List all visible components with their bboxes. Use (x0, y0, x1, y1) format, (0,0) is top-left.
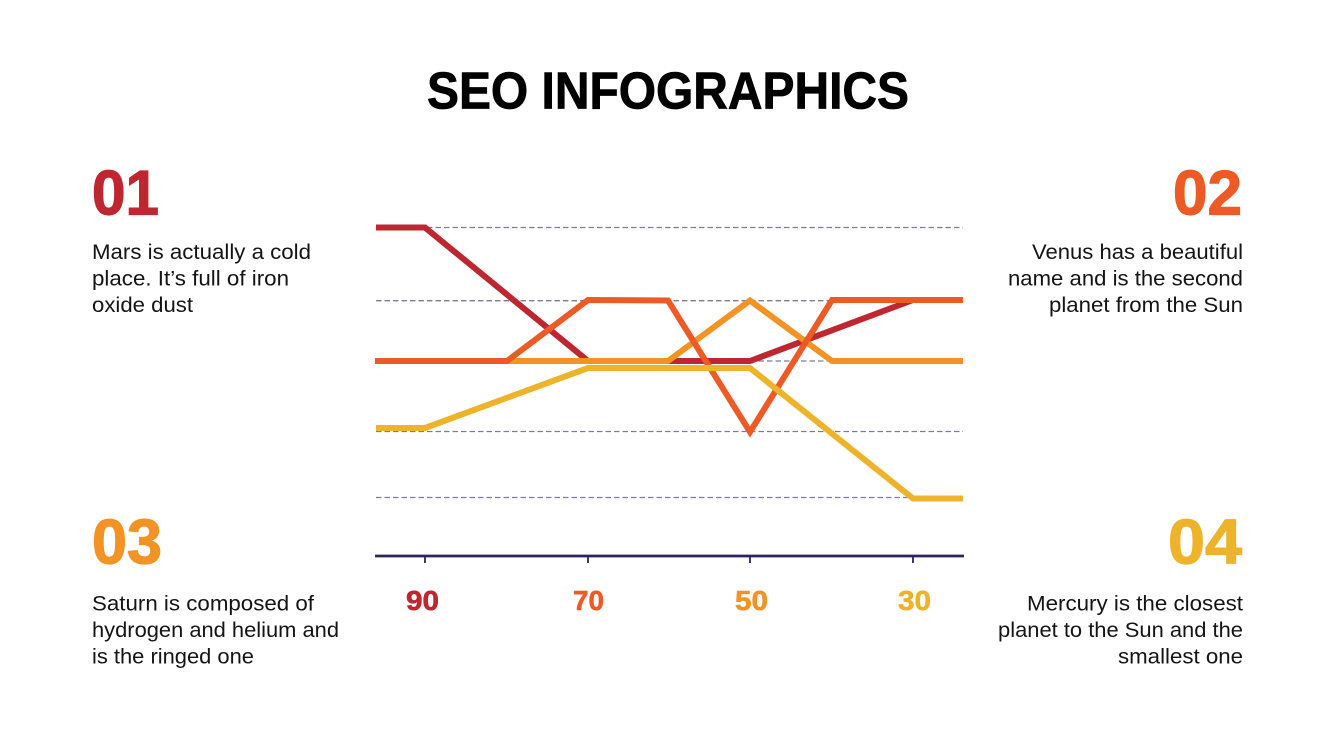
series: orange line (375, 300, 963, 361)
text block: Mars: Mars is actually a cold (92, 240, 311, 264)
number 03: 03 (92, 508, 162, 578)
text block: Saturn (92, 592, 339, 668)
series: yellow line (376, 368, 963, 498)
panel: 03 Saturn (92, 508, 339, 668)
text block: Saturn: is the ringed one (92, 644, 254, 668)
panel: 04 Mercury (998, 508, 1243, 668)
text block: Venus: planet from the Sun (1049, 293, 1243, 317)
text block: Mars: place. It’s full of iron (92, 266, 289, 290)
axis label 30: 30 (898, 585, 931, 616)
series: red line (376, 228, 963, 361)
number 04: 04 (1168, 508, 1242, 578)
text block: Venus: name and is the second (1008, 266, 1243, 290)
text block: Venus (1008, 240, 1243, 317)
panel: 01 Mars (92, 158, 311, 317)
series: dark orange line (375, 300, 963, 432)
text block: Saturn: hydrogen and helium and (92, 618, 339, 642)
text block: Mercury: planet to the Sun and the (998, 618, 1243, 642)
x axis (375, 556, 964, 563)
text block: Mercury: Mercury is the closest (1027, 592, 1243, 616)
text block: Saturn: Saturn is composed of (92, 592, 314, 616)
panel: 02 Venus (1008, 158, 1243, 317)
line chart (375, 228, 964, 616)
axis label 70: 70 (573, 585, 604, 616)
text block: Mercury (998, 592, 1243, 668)
axis label 50: 50 (735, 585, 768, 616)
title: SEO INFOGRAPHICS (427, 62, 909, 120)
text block: Mercury: smallest one (1118, 644, 1243, 668)
text block: Venus: Venus has a beautiful (1032, 240, 1243, 264)
text block: Mars: oxide dust (92, 293, 193, 317)
number 02: 02 (1173, 158, 1242, 228)
text block: Mars (92, 240, 311, 317)
number 01: 01 (92, 158, 159, 228)
axis label 90: 90 (406, 585, 439, 616)
